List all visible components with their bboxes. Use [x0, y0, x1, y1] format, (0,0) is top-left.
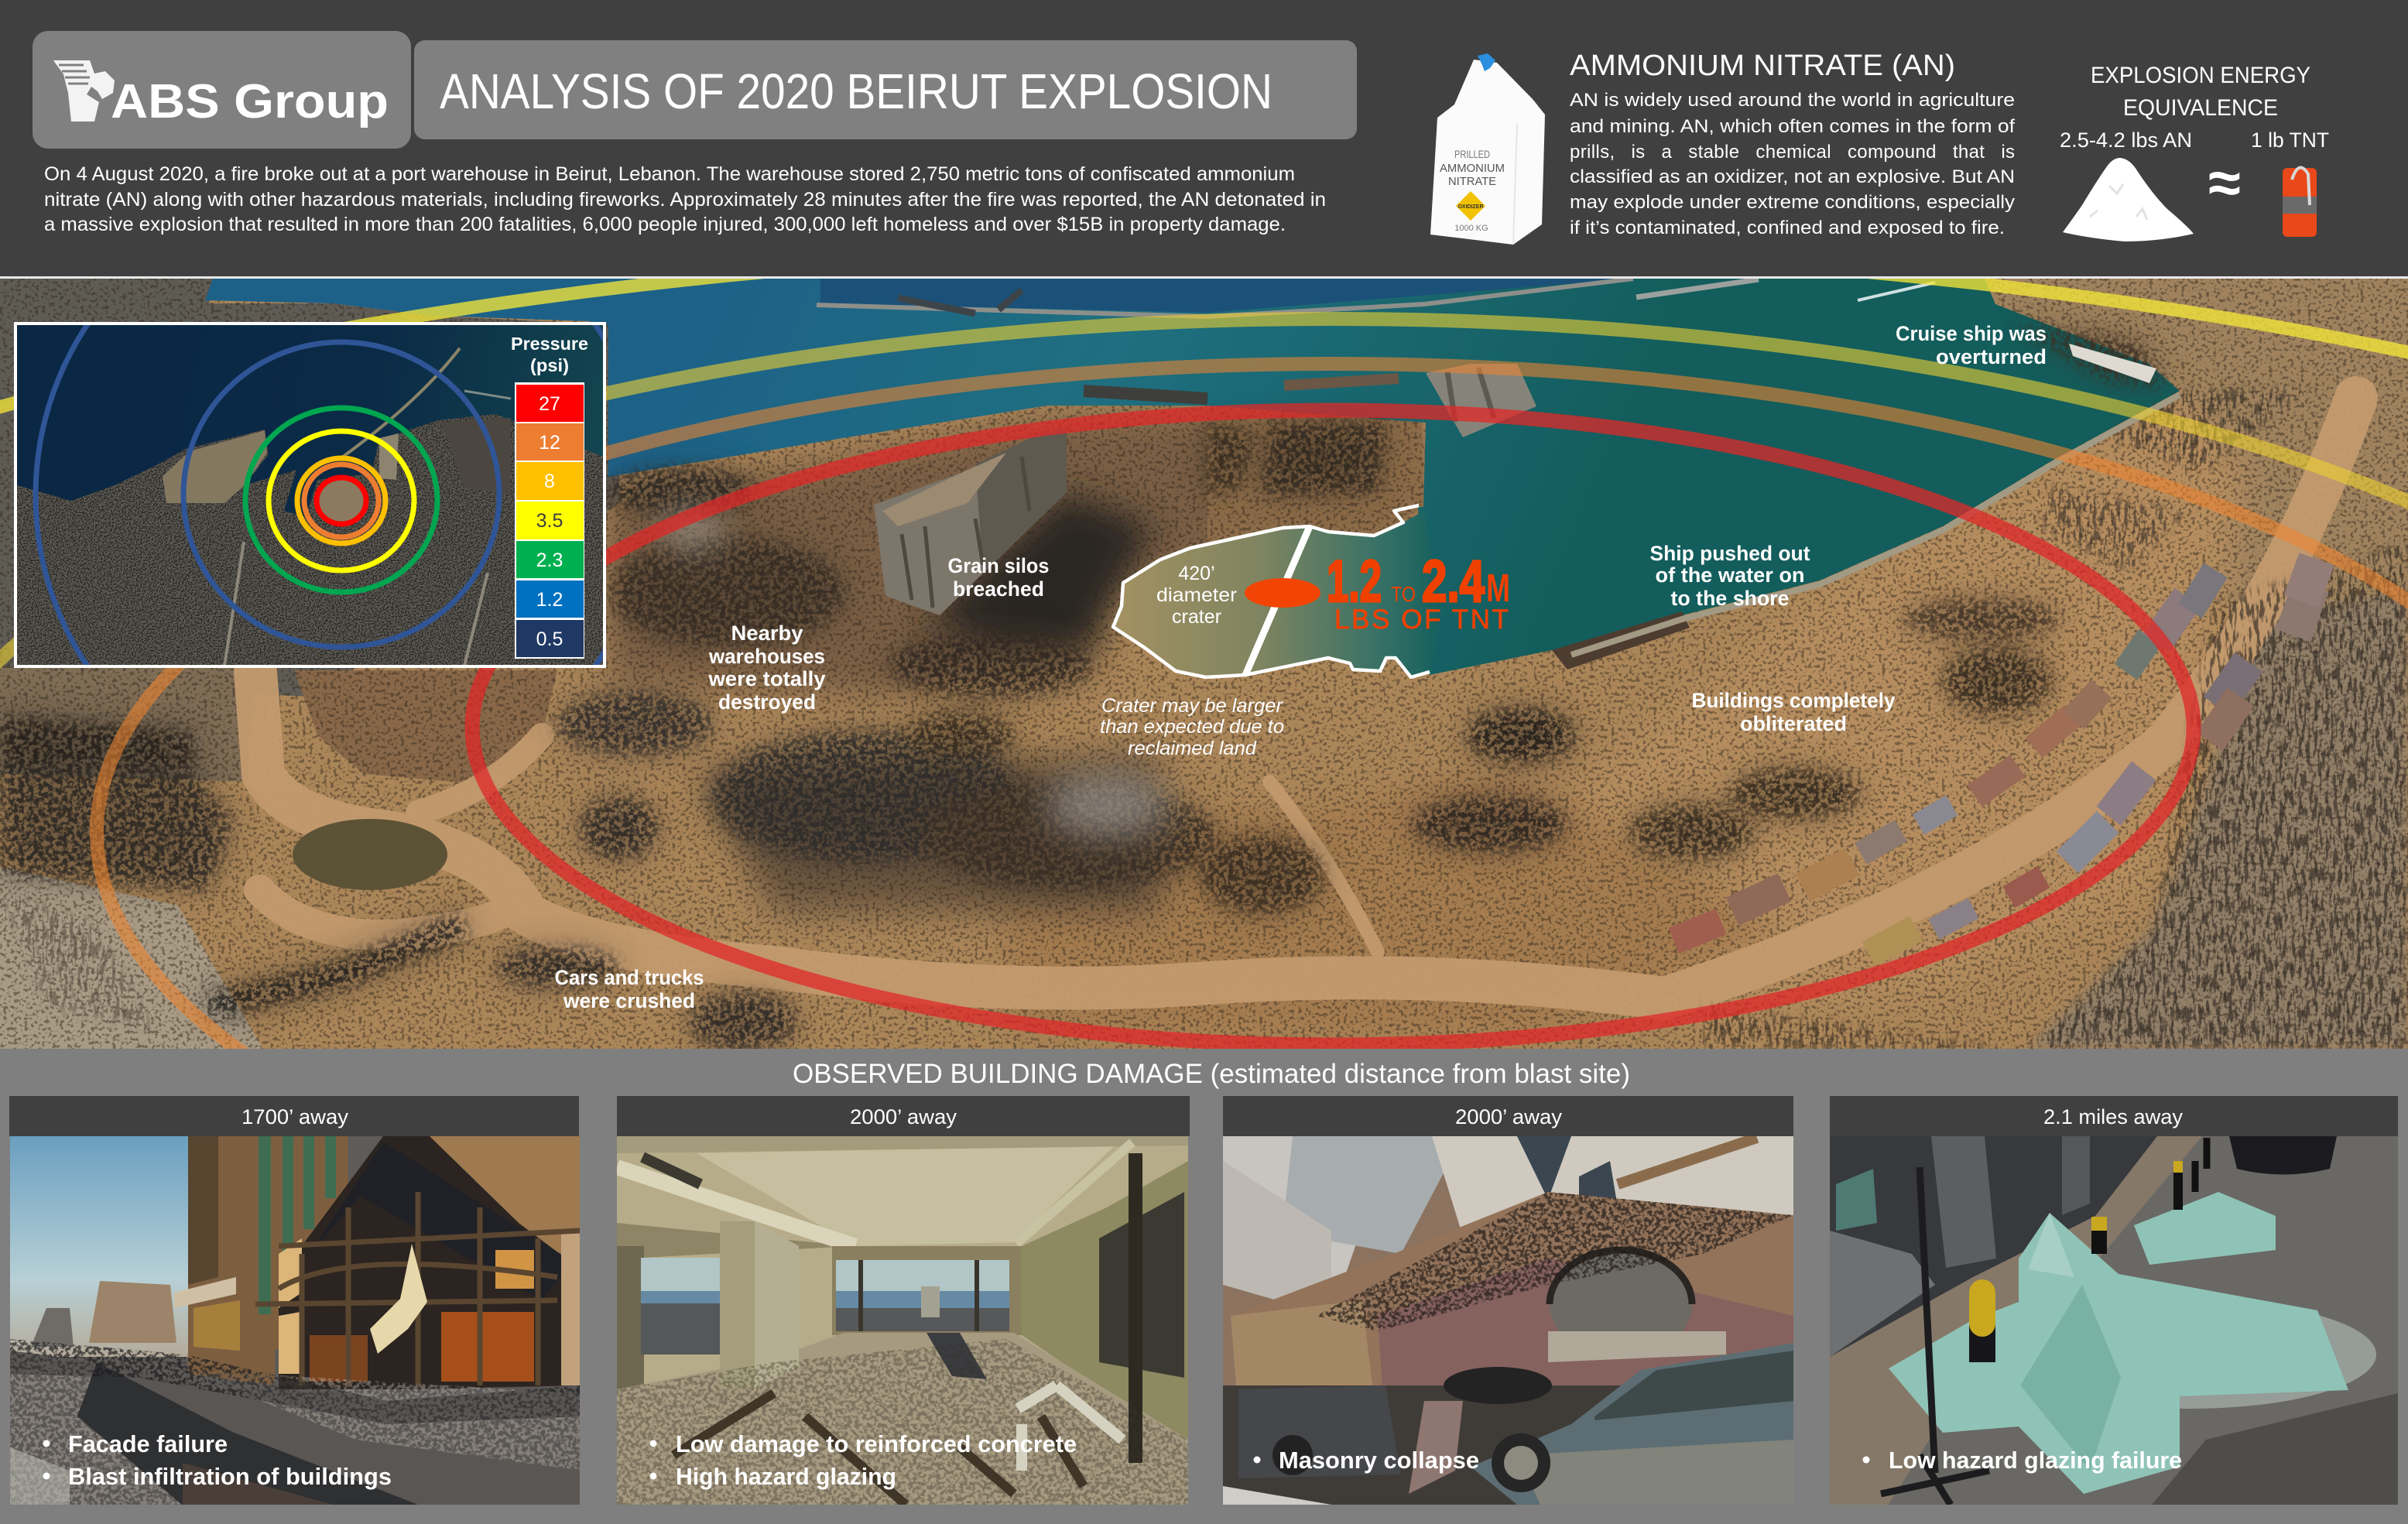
ring: 0.5 psi: [36, 189, 647, 802]
label: warehouses: Nearby: [731, 622, 803, 645]
ammonium nitrate description: [1570, 90, 2015, 238]
crater diameter label: crater: [1172, 606, 1221, 628]
label: grain silos: [947, 554, 1050, 601]
blast ring: 12 psi: [97, 364, 2408, 1300]
blast ring: 8 psi: [0, 319, 2408, 1402]
ships at pier: [1084, 364, 1536, 437]
outer sea and breakwater: [817, 279, 1935, 317]
crater note: Crater may be larger: [1101, 695, 1284, 717]
ring: 2.3 psi: [245, 408, 437, 592]
TNT equivalence callout: [1327, 549, 1510, 635]
wrecked ship on shore: [1552, 611, 1690, 670]
ammonium nitrate description: may explode under extreme conditions, especially: [1570, 192, 2015, 213]
intro text block: On 4 August 2020, a fire broke out at a port warehouse in Beirut, Lebanon. The warehouse stored 2,750 metric tons of confiscated ammonium: [44, 163, 1295, 185]
ammonium nitrate description: if it’s contaminated, confined and exposed to fire.: [1570, 217, 2005, 238]
panel: pressure map inset: [14, 189, 647, 802]
ring: 8 psi: [297, 458, 385, 543]
pressure legend: [515, 382, 584, 659]
intro text block: nitrate (AN) along with other hazardous materials, including fireworks. Approximately 28 minutes after the fire was reported, the AN detonated in: [44, 189, 1326, 211]
label: warehouses: were totally: [707, 667, 825, 690]
icon: ammonium nitrate bulk bag: PRILLED: [1454, 148, 1490, 160]
pressure legend: 3.5: [536, 510, 563, 532]
shipping containers along road: [1669, 553, 2334, 966]
label: cars and trucks: Cars and trucks: [554, 966, 704, 989]
pressure legend: 12: [539, 432, 560, 454]
pressure legend: 8: [544, 471, 555, 492]
ring: 12 psi: [304, 464, 378, 537]
ammonium nitrate description: and mining. AN, which often comes in the form of: [1570, 116, 2015, 137]
damage bullets: Facade failure: [68, 1430, 228, 1457]
icon: ammonium nitrate bulk bag: NITRATE: [1448, 175, 1496, 188]
ring: 1.2 psi: [183, 342, 499, 647]
fine ground texture: [0, 279, 2408, 1049]
top divider: [0, 276, 2408, 279]
crater diameter line: [1245, 526, 1310, 675]
damage bullets: [43, 1430, 392, 1490]
label: cruise ship: Cruise ship was: [1896, 322, 2047, 345]
panel: 1700 ft away: [9, 1096, 581, 1505]
crater note: reclaimed land: [1128, 738, 1257, 759]
label: buildings obliterated: Buildings completely: [1692, 689, 1895, 712]
icon: ammonium nitrate bulk bag: [1430, 53, 1545, 245]
label: cruise ship: [1896, 322, 2047, 368]
label: ship pushed out: [1650, 542, 1810, 610]
TNT quantity label: 1 lb TNT: [2251, 128, 2329, 152]
TNT equivalence callout: TO: [1391, 582, 1416, 606]
distance label: 2.1 miles away: [2043, 1105, 2183, 1128]
label: cars and trucks: were crushed: [563, 989, 695, 1012]
equivalence heading: EXPLOSION ENERGY: [2091, 63, 2310, 88]
legend title: Pressure: [511, 334, 588, 354]
title: ANALYSIS OF 2020 BEIRUT EXPLOSION: [440, 63, 1273, 119]
debris fields: [0, 325, 2167, 1049]
crater diameter label: 420’: [1178, 563, 1215, 584]
AN quantity label: 2.5-4.2 lbs AN: [2060, 128, 2192, 152]
equivalence heading: EQUIVALENCE: [2123, 95, 2278, 121]
explosion energy equivalence: [2060, 63, 2329, 241]
intro text block: [44, 163, 1326, 235]
crater note: [1100, 695, 1284, 759]
label: warehouses: [707, 622, 825, 714]
photo: masonry collapse: [1223, 1136, 1793, 1505]
damage bullets: [650, 1430, 1077, 1490]
ring: 3.5 psi: [269, 431, 414, 570]
section heading: OBSERVED BUILDING DAMAGE (estimated distance from blast site): [793, 1059, 1630, 1089]
header band: [33, 31, 2329, 245]
pressure legend: 27: [539, 393, 560, 415]
ground tones: [0, 279, 2408, 1049]
crater diameter label: [1156, 563, 1237, 628]
photo: glazing failure: [1830, 1136, 2398, 1505]
photo: facade failure: [10, 1136, 581, 1505]
panel: 2.1 miles away: [1830, 1096, 2398, 1505]
water: harbour and basin: [205, 279, 2180, 675]
grain silos: [874, 428, 1067, 615]
damage bullet: Low hazard glazing failure: [1889, 1447, 2182, 1474]
label: buildings obliterated: [1692, 689, 1895, 735]
TNT equivalence callout: LBS OF TNT: [1334, 604, 1509, 635]
logo wordmark: ABS Group: [111, 75, 389, 128]
crater diameter label: diameter: [1156, 584, 1237, 606]
logo panel: [33, 31, 411, 149]
crater outline: [1113, 505, 1430, 677]
icon: ammonium nitrate pile: [2063, 158, 2194, 241]
building damage section: [0, 1049, 2408, 1524]
silo shadow: [924, 492, 1156, 655]
debris underlay: [0, 325, 2167, 1049]
label: ship pushed out: to the shore: [1670, 587, 1790, 610]
label: ship pushed out: of the water on: [1655, 563, 1805, 587]
damage bullet: Masonry collapse: [1279, 1447, 1479, 1474]
label: cruise ship: overturned: [1936, 345, 2047, 368]
damage bullets: Low damage to reinforced concrete: [676, 1430, 1077, 1457]
equivalence heading: [2091, 63, 2310, 121]
striped blast debris right side: [0, 389, 2408, 1049]
crater note: than expected due to: [1100, 716, 1284, 738]
satellite map: [17, 189, 647, 802]
ring: 27 psi: [317, 478, 366, 524]
TNT equivalence callout: M: [1486, 566, 1510, 610]
grey port land top left: [0, 279, 619, 697]
distance label: 1700’ away: [241, 1105, 349, 1128]
icon: ammonium nitrate bulk bag: OXIDIZER: [1457, 204, 1484, 210]
damage bullets: High hazard glazing: [676, 1463, 896, 1490]
blast ring: 27 psi: [472, 410, 2194, 1045]
label: grain silos: breached: [953, 577, 1044, 601]
damage bullets: Blast infiltration of buildings: [68, 1463, 392, 1490]
icon: ammonium nitrate bulk bag: AMMONIUM: [1440, 162, 1505, 175]
blast centre marker: [1245, 578, 1320, 608]
label: warehouses: warehouses: [708, 645, 825, 668]
distance label: 2000’ away: [1455, 1105, 1563, 1128]
title banner: [414, 40, 1357, 139]
ammonium nitrate heading: AMMONIUM NITRATE (AN): [1570, 50, 1955, 82]
smoke plumes: [662, 512, 1169, 836]
ammonium nitrate description: prills, is a stable chemical compound that is: [1570, 142, 2015, 163]
cruise ship overturned: [2069, 344, 2156, 383]
label: grain silos: Grain silos: [947, 554, 1050, 577]
label: ship pushed out: Ship pushed out: [1650, 542, 1810, 565]
pressure legend: 2.3: [536, 550, 563, 571]
legend title: (psi): [530, 355, 569, 375]
distance label: 2000’ away: [850, 1105, 957, 1128]
sandy roads: [255, 398, 2356, 998]
label: buildings obliterated: obliterated: [1740, 712, 1847, 735]
crater water fill: [1113, 511, 1440, 677]
icon: ABS eagle emblem: [53, 60, 115, 122]
panel: 2000 ft away masonry: [1223, 1096, 1793, 1505]
shore edge: [1571, 395, 2180, 655]
intro text block: a massive explosion that resulted in more than 200 fatalities, 6,000 people injured, 300,000 left homeless and over $15B in property damage.: [44, 214, 1286, 235]
roundabout patch: [293, 819, 447, 890]
label: warehouses: destroyed: [718, 690, 816, 714]
pressure legend: 1.2: [536, 589, 563, 611]
aerial photo of blast site: [0, 279, 2408, 1049]
label: cars and trucks: [554, 966, 704, 1012]
legend title: [511, 334, 588, 375]
icon: TNT stick: [2283, 167, 2317, 237]
panel: 2000 ft away interior: [617, 1096, 1190, 1505]
pressure legend: 0.5: [536, 628, 563, 650]
TNT equivalence callout: 1.2: [1327, 549, 1382, 615]
icon: ammonium nitrate bulk bag: 1000 KG: [1454, 224, 1488, 233]
approximately equal sign: ≈: [2208, 150, 2241, 216]
ammonium nitrate description: AN is widely used around the world in agriculture: [1570, 90, 2015, 111]
ammonium nitrate description: classified as an oxidizer, not an explosive. But AN: [1570, 166, 2015, 187]
TNT equivalence callout: 2.4: [1422, 549, 1485, 615]
photo: interior damage: [617, 1136, 1188, 1505]
